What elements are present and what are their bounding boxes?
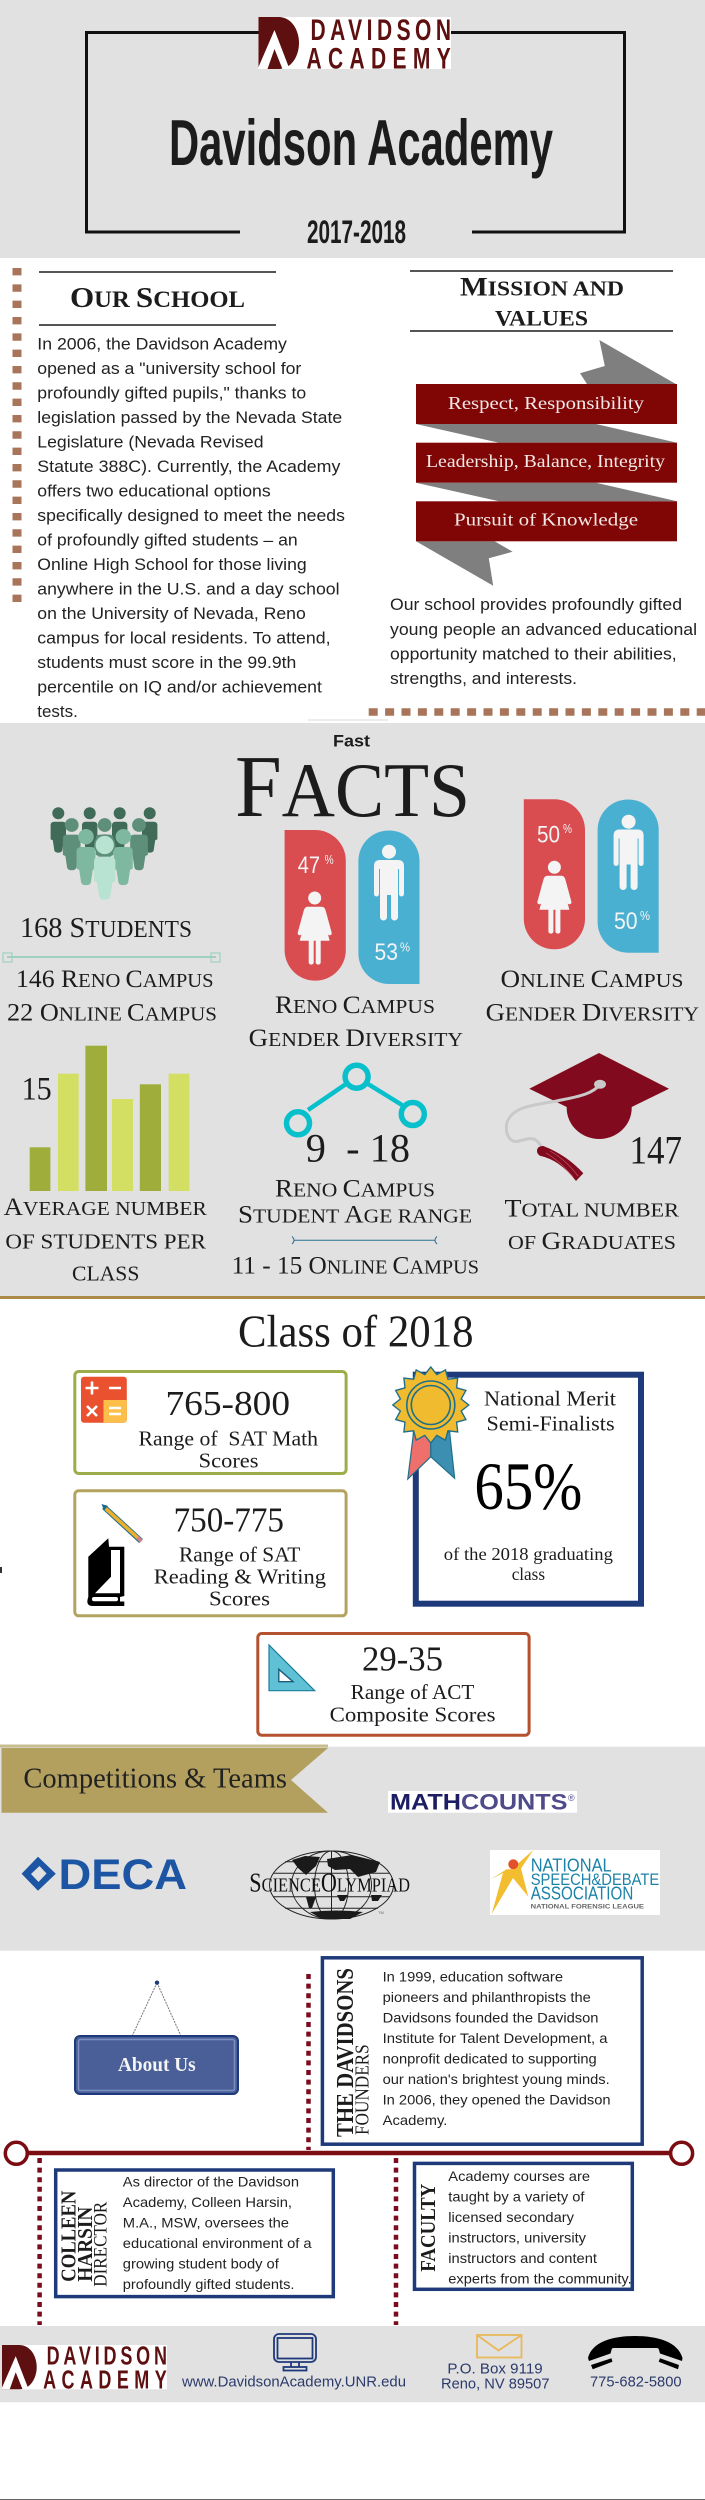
panel: competitions and teams — [0, 1744, 705, 1951]
card: the Davidsons founders: pioneers and philanthropists the — [383, 1989, 591, 2005]
card: SAT reading and writing: Reading & Writing — [154, 1564, 327, 1588]
icon: graduation cap — [506, 1053, 669, 1181]
contact: phone: 775-682-5800 — [590, 2374, 682, 2391]
panel: mission and values — [369, 271, 705, 712]
icon: calculator — [81, 1377, 127, 1423]
school description: Online High School for those living — [37, 556, 307, 574]
logo: national speech and debate association: SPEECH&DEBATE — [531, 1870, 659, 1889]
sign: about us: About Us — [118, 2054, 196, 2076]
heading: our school — [39, 272, 276, 325]
school description: Legislature (Nevada Revised — [37, 433, 263, 451]
logo: mathcounts: MATH COUNTS — [390, 1789, 568, 1814]
heading: mission and values: MISSION AND — [460, 273, 624, 302]
logo: national speech and debate association: ASSOCIATION — [531, 1883, 633, 1903]
card: national merit — [393, 1367, 641, 1604]
fact: total graduates: TOTAL NUMBER — [504, 1196, 680, 1223]
card: SAT math: Scores — [199, 1449, 258, 1473]
card: the Davidsons founders: Davidsons founded the Davidson — [383, 2010, 598, 2026]
panel: footer — [0, 2326, 705, 2402]
contact: phone — [588, 2336, 682, 2391]
chart: reno male 53%: % — [400, 940, 410, 955]
school description: students must score in the 99.9th — [37, 654, 296, 672]
fact: total graduates — [504, 1053, 682, 1255]
card: the Davidsons founders — [322, 1958, 642, 2144]
card: the Davidsons founders: Academy. — [383, 2112, 447, 2128]
school description: on the University of Nevada, Reno — [37, 605, 306, 623]
card: Colleen Harsin director: COLLEEN — [56, 2191, 80, 2282]
fact: online gender diversity: ONLINE CAMPUS — [500, 966, 684, 993]
contact: mailing address: P.O. Box 9119 — [447, 2360, 543, 2377]
card: national merit: 65% — [474, 1448, 582, 1524]
heading: fast facts: FACTS — [235, 739, 470, 836]
school description — [37, 335, 345, 721]
heading: our school: OUR SCHOOL — [70, 282, 245, 314]
fact: student age range — [232, 1065, 479, 1279]
icon: group of students — [51, 807, 157, 900]
chart: reno female 47% — [285, 830, 346, 981]
fact: student age range: 11 - 15 ONLINE CAMPUS — [232, 1252, 479, 1279]
logo: Davidson Academy: DAVIDSON — [310, 15, 451, 47]
school description: anywhere in the U.S. and a day school — [37, 580, 340, 598]
school description: In 2006, the Davidson Academy — [37, 335, 288, 353]
card: the Davidsons founders: Institute for Talent Development, a — [383, 2030, 608, 2046]
dotted row — [369, 708, 705, 716]
icon: monitor — [274, 2334, 316, 2370]
icon: envelope — [477, 2335, 522, 2358]
fact: student age range: 9 - 18 — [306, 1126, 410, 1171]
logo: national speech and debate association — [490, 1850, 660, 1915]
card: SAT reading and writing: Scores — [209, 1587, 270, 1611]
bar chart — [30, 1046, 189, 1191]
icon: telephone — [588, 2336, 682, 2369]
banner — [0, 1744, 328, 1813]
card: national merit: Semi-Finalists — [486, 1412, 615, 1436]
logo: Davidson Academy: ACADEMY — [306, 43, 451, 75]
card: Colleen Harsin director — [56, 2170, 333, 2297]
mission statement: opportunity matched to their abilities, — [390, 645, 677, 663]
card: the Davidsons founders: In 2006, they opened the Davidson — [383, 2092, 611, 2108]
logo: Davidson Academy footer — [2, 2341, 167, 2394]
card: faculty: Academy courses are — [448, 2168, 590, 2184]
mission statement — [390, 596, 697, 688]
card: ACT: 29-35 — [362, 1640, 443, 1679]
card: faculty: FACULTY — [416, 2184, 440, 2272]
heading: mission and values: VALUES — [495, 306, 588, 331]
card: faculty: instructors, university — [448, 2230, 586, 2246]
school description: legislation passed by the Nevada State — [37, 409, 342, 427]
card: SAT math — [75, 1372, 346, 1474]
icon: set square — [269, 1645, 315, 1691]
logo: Davidson Academy footer: DAVIDSON — [47, 2341, 167, 2370]
logo: DECA: DECA — [58, 1851, 187, 1899]
card: faculty — [414, 2163, 632, 2289]
school description: offers two educational options — [37, 482, 271, 500]
card: the Davidsons founders: nonprofit dedicated to supporting — [383, 2051, 597, 2067]
fact: total graduates: OF GRADUATES — [508, 1228, 676, 1255]
school description: campus for local residents. To attend, — [37, 629, 331, 647]
card: ACT: Range of ACT — [351, 1680, 475, 1704]
banner: Competitions & Teams — [23, 1764, 287, 1795]
ribbon with values: Leadership, Balance, Integrity — [426, 451, 665, 471]
card: Colleen Harsin director: As director of the Davidson — [123, 2174, 299, 2190]
card: Colleen Harsin director: growing student body of — [123, 2256, 279, 2272]
card: SAT math: Range of SAT Math — [138, 1427, 319, 1451]
card: SAT reading and writing: Range of SAT — [179, 1543, 301, 1567]
fact: average class size: AVERAGE NUMBER — [4, 1194, 208, 1221]
fact: average class size — [4, 1046, 208, 1286]
chart: online male 50%: % — [640, 908, 650, 923]
logo: science olympiad: TM — [378, 1910, 384, 1915]
school description: percentile on IQ and/or achievement — [37, 678, 322, 696]
heading: fast facts: Fast — [333, 732, 370, 751]
card: the Davidsons founders: THE DAVIDSONS — [333, 1968, 359, 2137]
fact: online gender diversity: GENDER DIVERSITY — [486, 1000, 699, 1027]
contact: website: www.DavidsonAcademy.UNR.edu — [181, 2374, 406, 2391]
chart: reno male 53% — [358, 830, 420, 984]
timeline — [5, 1974, 693, 2325]
panel: our school — [17, 268, 345, 721]
chart: reno female 47%: 47 — [298, 852, 320, 879]
icon: line graph — [286, 1065, 424, 1135]
card: national merit: class — [512, 1564, 545, 1584]
card: the Davidsons founders: our nation's brightest young minds. — [383, 2071, 610, 2087]
fact: 168 students — [3, 807, 220, 1027]
fact: 168 students: 146 RENO CAMPUS — [16, 966, 214, 993]
chart: online male 50% — [598, 799, 659, 953]
card: Colleen Harsin director: educational environment of a — [123, 2235, 312, 2251]
fact: total graduates: 147 — [630, 1127, 682, 1172]
school description: of profoundly gifted students – an — [37, 531, 298, 549]
heading: mission and values — [410, 271, 673, 331]
panel: about us — [5, 1958, 693, 2325]
logo: science olympiad — [249, 1851, 410, 1919]
heading: class of 2018: Class of 2018 — [238, 1307, 474, 1357]
card: faculty: experts from the community. — [448, 2270, 632, 2286]
chart: online male 50%: 50 — [614, 908, 638, 935]
logo: mathcounts: ® — [568, 1793, 575, 1803]
fact: 168 students: 22 ONLINE CAMPUS — [7, 1000, 217, 1027]
mission statement: young people an advanced educational — [390, 621, 697, 639]
contact: website — [181, 2334, 406, 2391]
mission statement: Our school provides profoundly gifted — [390, 596, 682, 614]
card: ACT: Composite Scores — [330, 1703, 496, 1727]
fact: student age range: RENO CAMPUS — [275, 1176, 435, 1203]
ribbon with values — [416, 340, 677, 586]
icon: book — [87, 1538, 124, 1606]
fact: reno gender diversity — [249, 830, 463, 1052]
fact: average class size: CLASS — [72, 1262, 139, 1286]
card: the Davidsons founders: In 1999, education software — [383, 1969, 563, 1985]
logo: national speech and debate association: NATIONAL FORENSIC LEAGUE — [531, 1903, 645, 1910]
school description: Statute 388C). Currently, the Academy — [37, 458, 341, 476]
logo: Davidson Academy — [258, 15, 451, 75]
card: faculty: taught by a variety of — [448, 2188, 585, 2204]
header frame — [86, 32, 624, 232]
icon: medal — [393, 1367, 469, 1479]
logo: science olympiad: SCIENCEOLYMPIAD — [249, 1868, 410, 1898]
fact: student age range: STUDENT AGE RANGE — [238, 1201, 472, 1228]
card: the Davidsons founders: FOUNDERS — [352, 2044, 374, 2135]
fact: online gender diversity — [486, 799, 699, 1027]
fact: average class size: OF STUDENTS PER — [5, 1229, 206, 1253]
contact: mailing address: Reno, NV 89507 — [441, 2375, 550, 2392]
panel: fast facts — [0, 720, 705, 1299]
sign: about us — [75, 1980, 238, 2094]
logo: national speech and debate association: NATIONAL — [531, 1856, 612, 1876]
chart: online female 50% — [524, 799, 585, 949]
chart: reno female 47%: % — [325, 852, 334, 867]
card: Colleen Harsin director: Academy, Colleen Harsin, — [123, 2194, 292, 2210]
card: Colleen Harsin director: profoundly gifted students. — [123, 2276, 294, 2292]
card: faculty: instructors and content — [448, 2250, 597, 2266]
school description: tests. — [37, 703, 78, 721]
card: national merit: of the 2018 graduating — [444, 1544, 613, 1564]
fact: 168 students: 168 STUDENTS — [20, 912, 192, 944]
card: Colleen Harsin director: HARSIN — [73, 2207, 97, 2282]
chart: online female 50%: 50 — [537, 822, 560, 849]
fact: reno gender diversity: RENO CAMPUS — [275, 992, 435, 1019]
card: SAT reading and writing: 750-775 — [174, 1501, 284, 1540]
card: SAT reading and writing — [75, 1491, 346, 1616]
card: SAT math: 765-800 — [166, 1384, 290, 1423]
panel: header — [0, 0, 705, 258]
panel: class of 2018 — [0, 1307, 641, 1735]
fact: reno gender diversity: GENDER DIVERSITY — [249, 1025, 463, 1052]
chart: online female 50%: % — [563, 821, 572, 836]
mission statement: strengths, and interests. — [390, 670, 577, 688]
fact: average class size: 15 — [22, 1071, 52, 1107]
year: 2017-2018 — [307, 214, 406, 250]
card: faculty: licensed secondary — [448, 2209, 574, 2225]
card: Colleen Harsin director: M.A., MSW, oversees the — [123, 2215, 289, 2231]
school description: opened as a "university school for — [37, 360, 302, 378]
card: Colleen Harsin director: DIRECTOR — [90, 2201, 112, 2287]
chart: reno male 53%: 53 — [374, 939, 398, 966]
logo: Davidson Academy footer: ACADEMY — [43, 2366, 167, 2394]
card: national merit: National Merit — [484, 1387, 616, 1411]
school description: profoundly gifted pupils," thanks to — [37, 384, 306, 402]
icon: pencil — [102, 1504, 142, 1541]
contact: mailing address — [441, 2335, 550, 2392]
ribbon with values: Pursuit of Knowledge — [454, 510, 638, 530]
card: ACT — [258, 1634, 529, 1735]
school description: specifically designed to meet the needs — [37, 507, 345, 525]
dotted column — [12, 268, 22, 603]
ribbon with values: Respect, Responsibility — [448, 393, 644, 413]
